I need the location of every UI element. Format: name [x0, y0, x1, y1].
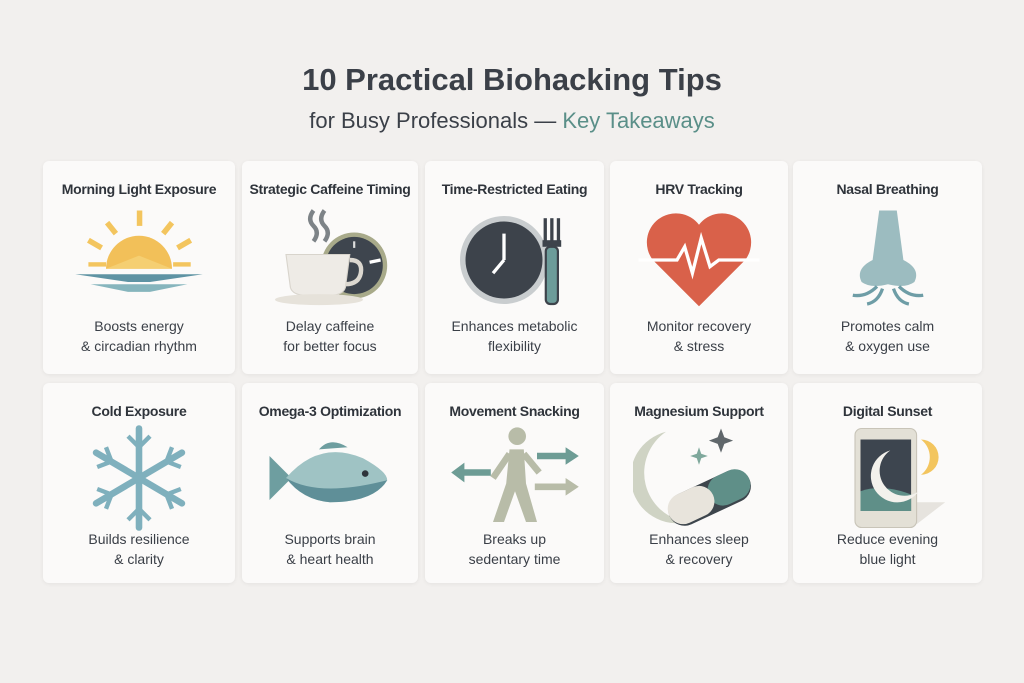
panel: caffeine: Delay caffeine — [286, 318, 374, 334]
panel: morning light: & circadian rhythm — [81, 338, 197, 354]
panel: digital sunset: Digital Sunset — [843, 403, 932, 419]
panel: nasal breathing: & oxygen use — [845, 338, 930, 354]
icon: fish — [270, 442, 388, 502]
panel: morning light: Morning Light Exposure — [62, 181, 216, 197]
panel: omega-3 — [242, 383, 418, 583]
panel: movement snacking: Movement Snacking — [449, 403, 580, 419]
panel: HRV — [610, 161, 788, 374]
panel: digital sunset: blue light — [859, 551, 916, 567]
icon: nose — [852, 210, 924, 306]
panel: movement snacking — [425, 383, 604, 583]
panel: cold exposure: Builds resilience — [88, 531, 190, 547]
icon: snowflake — [92, 425, 186, 531]
icon: heart — [646, 213, 752, 306]
subtitle: for Busy Professionals — Key Takeaways — [309, 108, 715, 133]
panel: HRV: HRV Tracking — [655, 181, 743, 197]
panel: omega-3: & heart health — [286, 551, 374, 567]
panel: cold exposure: Cold Exposure — [92, 403, 186, 419]
panel: time-restricted eating: Enhances metabolic — [451, 318, 578, 334]
panel: digital sunset — [793, 383, 982, 583]
icon: clock and fork — [460, 216, 562, 306]
icon: phone and moon — [854, 428, 945, 528]
panel: omega-3: Supports brain — [284, 531, 376, 547]
icon: sunrise — [76, 210, 202, 292]
panel: magnesium — [610, 383, 788, 583]
panel: time-restricted eating: Time-Restricted Eating — [442, 181, 587, 197]
panel: caffeine: for better focus — [283, 338, 377, 354]
panel: HRV: & stress — [674, 338, 724, 354]
panel: magnesium: & recovery — [666, 551, 732, 567]
icon: coffee and clock — [275, 209, 388, 305]
icon: walking figure with arrows — [451, 427, 579, 522]
panel: digital sunset: Reduce evening — [837, 531, 938, 547]
title: 10 Practical Biohacking Tips — [302, 62, 722, 97]
icon: moon and capsule — [633, 428, 751, 526]
panel: cold exposure: & clarity — [114, 551, 164, 567]
panel: nasal breathing: Promotes calm — [841, 318, 934, 334]
panel: cold exposure — [43, 383, 235, 583]
panel: time-restricted eating: flexibility — [488, 338, 541, 354]
panel: morning light — [43, 161, 235, 374]
panel: movement snacking: Breaks up — [483, 531, 546, 547]
panel: nasal breathing: Nasal Breathing — [836, 181, 939, 197]
panel: movement snacking: sedentary time — [469, 551, 560, 567]
panel: morning light: Boosts energy — [94, 318, 184, 334]
panel: magnesium: Enhances sleep — [649, 531, 749, 547]
panel: nasal breathing — [793, 161, 982, 374]
panel: caffeine: Strategic Caffeine Timing — [249, 181, 411, 197]
panel: caffeine — [242, 161, 418, 374]
panel: time-restricted eating — [425, 161, 604, 374]
panel: HRV: Monitor recovery — [647, 318, 751, 334]
panel: omega-3: Omega-3 Optimization — [259, 403, 401, 419]
panel: magnesium: Magnesium Support — [634, 403, 764, 419]
